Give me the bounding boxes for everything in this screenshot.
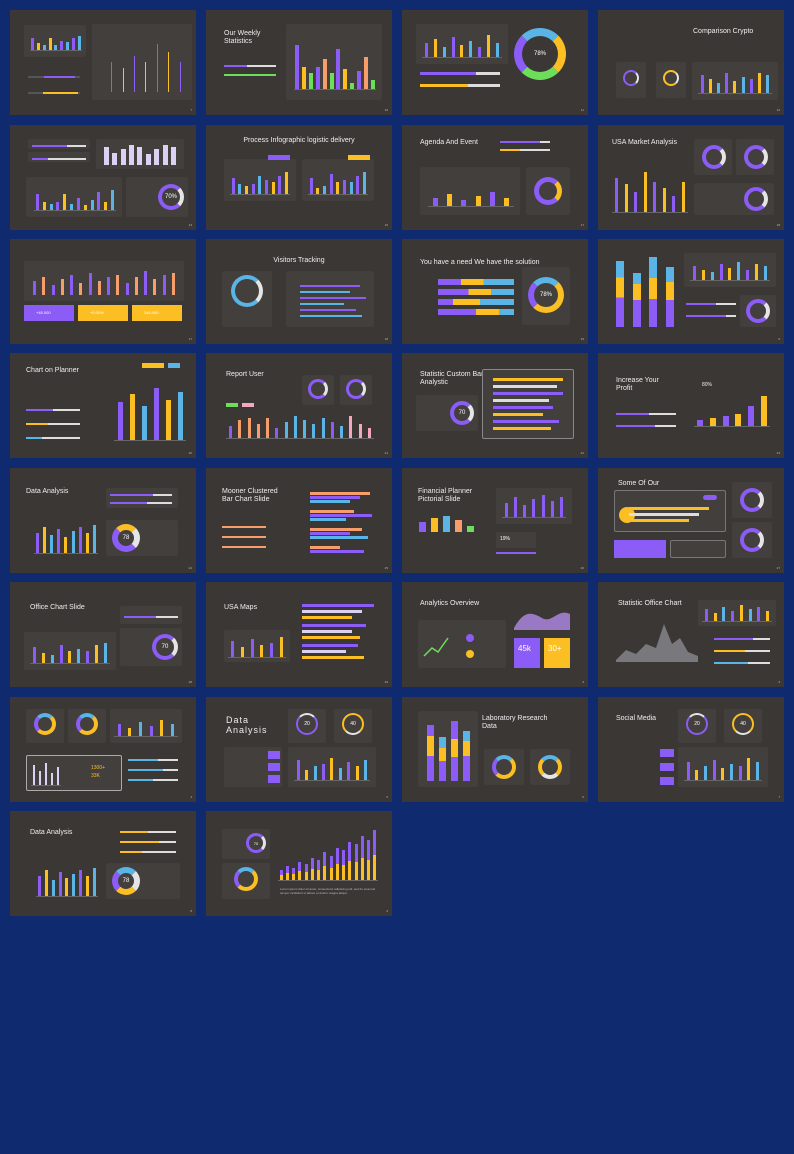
slide 13: [10, 353, 196, 458]
donuts: [288, 709, 326, 743]
slide 21: [10, 582, 196, 687]
panel: small chart: [24, 25, 86, 57]
slide 17: 24: [189, 566, 192, 570]
bars + donut: [686, 303, 736, 305]
panel: donut: [106, 520, 178, 556]
slide 12: [598, 239, 784, 344]
panel: chart: [684, 253, 776, 287]
slide 16: 23: [777, 451, 780, 455]
bar chart: [694, 393, 770, 427]
stat panel: [416, 395, 478, 431]
slide 4: [598, 10, 784, 115]
slide 3: 11: [581, 108, 584, 112]
title: Report User: [226, 371, 264, 378]
slide 5: 13: [189, 223, 192, 227]
slide 30: [206, 811, 392, 916]
progress bars: [616, 413, 676, 415]
caption text: Lorem ipsum dolor sit amet, consectetur adipiscing elit, sed do eiusmod tempor incididunt ut labore et dolore magna aliqua.: [280, 887, 375, 895]
panel: chart: [24, 632, 116, 670]
panel: chart: [692, 62, 778, 100]
panel: chart: [288, 747, 376, 787]
donut: [526, 167, 570, 215]
donut: [522, 267, 570, 325]
stat boxes: +45.000: [36, 310, 51, 315]
slide 12: 5: [778, 337, 780, 341]
horizontal bar chart: [310, 492, 372, 553]
progress bars: [500, 141, 550, 151]
panel: gradient bars: [24, 261, 184, 301]
chart: [612, 165, 688, 213]
list panel: [224, 747, 282, 787]
slide 30: 9: [386, 909, 388, 913]
slide 23: 3: [582, 680, 584, 684]
title: Social Media: [616, 715, 656, 722]
title: Data: [482, 723, 497, 730]
title: Chart on Planner: [26, 367, 79, 374]
panel: outlined: [26, 755, 122, 791]
slide 9: +0.00%: [90, 310, 104, 315]
title: Statistics: [224, 38, 252, 45]
progress bars: [224, 65, 276, 76]
slide 28: 7: [778, 795, 780, 799]
title: Our Weekly: [224, 30, 260, 37]
donuts: 20: [304, 721, 310, 727]
slide 1: 7: [190, 108, 192, 112]
title: Agenda And Event: [420, 139, 478, 146]
slide 8: 18: [777, 223, 780, 227]
stacked bar chart: [278, 827, 378, 881]
slide 27: [402, 697, 588, 802]
title: Process Infographic logistic delivery: [243, 137, 355, 144]
donut: 70: [162, 644, 168, 650]
slide 8: [598, 125, 784, 230]
slide 18: [206, 468, 392, 573]
panel: yellow bars: [614, 490, 726, 532]
progress bars: [28, 76, 80, 94]
slide 25: [10, 697, 196, 802]
donut: [120, 628, 182, 666]
stacked bars: [616, 257, 674, 327]
progress bars: [128, 759, 178, 761]
slide 15: 22: [581, 451, 584, 455]
slide 16: [598, 353, 784, 458]
panel: chart: [678, 747, 768, 787]
slide 10: 18: [385, 337, 388, 341]
slide 20: 27: [777, 566, 780, 570]
title: Data: [226, 715, 249, 725]
panel: donut: 78: [123, 535, 129, 541]
panel: stacked bars: [418, 711, 478, 787]
title: USA Maps: [224, 604, 257, 611]
title: Analysis: [226, 725, 268, 735]
slide 22: 29: [385, 680, 388, 684]
slide 19: [402, 468, 588, 573]
title: [616, 377, 659, 392]
title: Analystic: [420, 379, 448, 386]
chart: [36, 863, 98, 897]
slide 9: 245.000: [144, 310, 158, 315]
list: [660, 749, 674, 785]
slide 26: [206, 697, 392, 802]
title: Some Of Our: [618, 480, 659, 487]
stat box: [496, 532, 536, 548]
title: Analytics Overview: [420, 600, 479, 607]
slide 19: 26: [581, 566, 584, 570]
donuts: [694, 139, 732, 175]
donut panels: 70: [254, 840, 258, 846]
bar chart: [114, 377, 186, 441]
progress bars: [420, 72, 500, 87]
progress bars: [714, 638, 770, 640]
title: USA Market Analysis: [612, 139, 677, 146]
slide 14: [206, 353, 392, 458]
panel: sliders: [106, 488, 178, 508]
stacked horizontal bars: [438, 279, 514, 315]
panel: sliders: [120, 606, 182, 624]
progress bars: [26, 409, 80, 411]
slide 23: 30+: [548, 644, 562, 653]
slide 15: [402, 353, 588, 458]
donuts: [616, 62, 646, 98]
panel: chart: [496, 488, 572, 524]
panel: donut: [106, 863, 180, 899]
slide 16: 80%: [702, 382, 712, 388]
donuts: [678, 709, 716, 743]
sliders: [120, 831, 176, 853]
slide 28: 40: [740, 721, 746, 727]
title: [224, 30, 260, 45]
area chart: [616, 624, 698, 662]
donuts: [732, 482, 772, 518]
slide 14: 21: [385, 451, 388, 455]
title: Data Analysis: [26, 488, 68, 495]
title: Increase Your: [616, 377, 659, 384]
stat boxes: [614, 540, 666, 558]
area chart: [514, 612, 570, 630]
slide 28: [598, 697, 784, 802]
donuts: [484, 749, 524, 785]
panel: donut: [222, 271, 272, 327]
title: [482, 714, 547, 730]
slide 5: [10, 125, 196, 230]
slide 6: [206, 125, 392, 230]
title: Profit: [616, 385, 632, 392]
stat boxes: 45k: [518, 644, 531, 653]
slide 13: 20: [189, 451, 192, 455]
panel: white bars: [96, 139, 184, 169]
slide 18: 25: [385, 566, 388, 570]
slide 9: [10, 239, 196, 344]
title: Comparison Crypto: [693, 28, 753, 35]
pictorial bars: [419, 516, 474, 532]
panel: donut: 78: [123, 878, 129, 884]
panel: chart: [420, 167, 520, 215]
horizontal bars: [302, 604, 374, 659]
donut: 78%: [534, 51, 546, 57]
donut: [514, 28, 566, 80]
slide 6: 16: [385, 223, 388, 227]
donut panels: [222, 829, 270, 859]
slide 11: 19: [581, 337, 584, 341]
slide 3: [402, 10, 588, 115]
donuts: 20: [694, 721, 700, 727]
title: Data Analysis: [30, 829, 72, 836]
slide 26: 5: [386, 795, 388, 799]
slide 1: [10, 10, 196, 115]
title: [420, 370, 483, 386]
title: Statistic Office Chart: [618, 600, 682, 607]
slide 7: [402, 125, 588, 230]
title: You have a need We have the solution: [420, 259, 539, 266]
title: Pictorial Slide: [418, 496, 460, 503]
slide 2: 10: [385, 108, 388, 112]
title: Mooner Clustered: [222, 488, 278, 495]
panel: bar chart: [286, 24, 382, 100]
slide 10: [206, 239, 392, 344]
panel: chart: [110, 709, 182, 743]
panel: chart: [698, 600, 776, 626]
chart: [34, 518, 98, 554]
slide 25: 4: [190, 795, 192, 799]
progress bars: [28, 139, 90, 149]
title: [226, 715, 268, 735]
stat panel: 70: [459, 410, 465, 416]
slide 21: 28: [189, 680, 192, 684]
slide 11: [402, 239, 588, 344]
donut 70%: 70%: [165, 194, 177, 200]
panel: horizontal bars: [482, 369, 574, 439]
title: [418, 488, 472, 503]
donuts: [26, 709, 64, 743]
panel: outlined: 33K: [91, 773, 100, 779]
panel: line chart: [418, 620, 506, 668]
slide 26: 40: [350, 721, 356, 727]
slide 2: [206, 10, 392, 115]
slide 9: 17: [189, 337, 192, 341]
bar chart: [226, 413, 374, 439]
title: Statistic Custom Bar: [420, 371, 483, 378]
panel: bar chart: [416, 24, 508, 64]
slide 29: 8: [190, 909, 192, 913]
title: Bar Chart Slide: [222, 496, 269, 503]
two charts: [224, 159, 296, 201]
title: Financial Planner: [418, 488, 472, 495]
title: Office Chart Slide: [30, 604, 85, 611]
title: [222, 488, 278, 503]
slide 27: 6: [582, 795, 584, 799]
panel: chart: [26, 177, 122, 217]
donut: 78%: [540, 292, 552, 298]
slide 24: [598, 582, 784, 687]
progress bars: [222, 526, 266, 528]
donut 70%: [126, 177, 188, 217]
panel: horizontal bars: [286, 271, 374, 327]
slide 24: 3: [778, 680, 780, 684]
stat boxes: [24, 305, 74, 321]
panel: outlined: 1300+: [91, 765, 105, 771]
slide 17: [10, 468, 196, 573]
slide 23: [402, 582, 588, 687]
panel: chart: [224, 630, 290, 662]
stat boxes: [514, 638, 540, 668]
stat box: 19%: [500, 536, 510, 542]
slide 22: [206, 582, 392, 687]
panel: lollipop chart: [92, 24, 192, 100]
slide 7: 17: [581, 223, 584, 227]
title: Visitors Tracking: [273, 257, 325, 264]
donuts: [302, 375, 334, 405]
slide 20: [598, 468, 784, 573]
slide 29: [10, 811, 196, 916]
title: Laboratory Research: [482, 715, 547, 722]
slide 4: 12: [777, 108, 780, 112]
